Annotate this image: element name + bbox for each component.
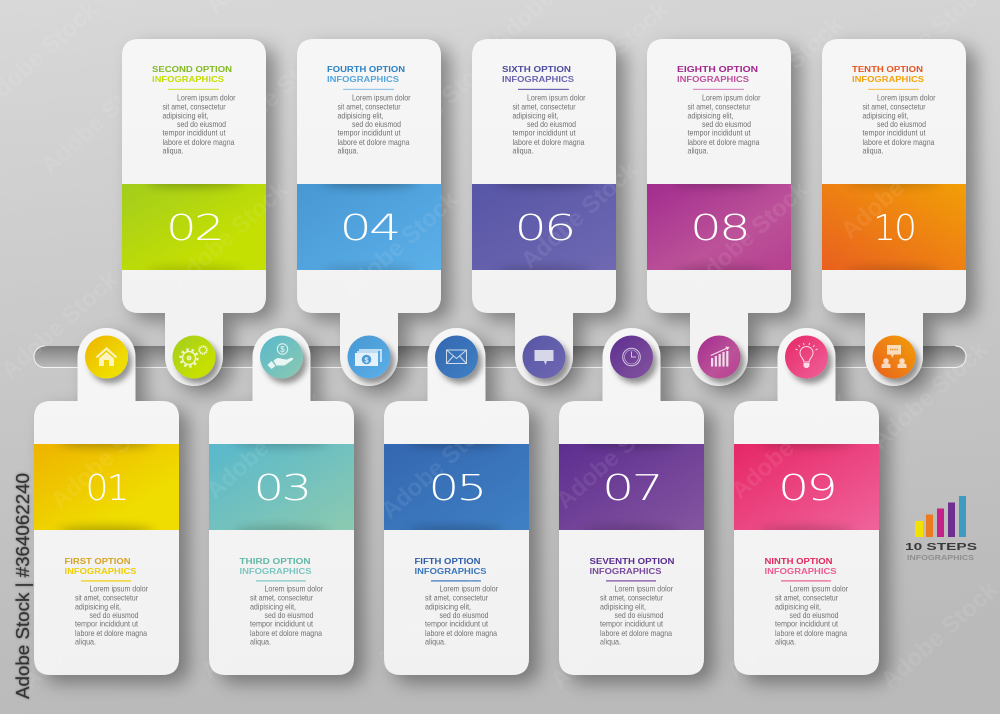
text block 08 [677,65,761,156]
icon: clock [610,336,653,378]
watermark: adobe stock pattern: Adobe Stock [371,556,499,674]
text block 02: tempor incididunt ut [162,129,226,138]
text block 06: sit amet, consectetur [512,102,576,111]
colour band 03: 03 [254,468,310,509]
text block 02: sed do eiusmod [177,120,226,129]
colour band 07: 07 [602,468,661,509]
watermark: adobe stock pattern: Adobe Stock [551,396,679,514]
colour band 10 [822,184,966,270]
card 05: fifth option [384,328,529,675]
icon: speech bubble [522,336,566,378]
text block 01: Lorem ipsum dolor [90,585,148,594]
text block 07: adipisicing elit, [600,602,646,611]
text block 08: INFOGRAPHICS [677,75,750,84]
text block 04: Lorem ipsum dolor [352,94,411,103]
text block 01: labore et dolore magna [75,629,147,638]
text block 07: sit amet, consectetur [600,593,663,602]
text block 06: adipisicing elit, [512,111,558,120]
text block 08: adipisicing elit, [688,111,734,120]
text block 05: FIFTH OPTION [414,557,481,566]
text block 08: sit amet, consectetur [688,102,751,111]
text block 07: tempor incididunt ut [600,620,664,629]
watermark: adobe stock pattern: Adobe Stock [36,61,164,179]
text block 06 [502,65,586,156]
text block 05: aliqua. [425,638,446,647]
text block 09: INFOGRAPHICS [764,567,837,576]
text block 08: EIGHTH OPTION [677,65,758,74]
colour band 10: 10 [873,208,915,249]
logo: 10 steps infographics: INFOGRAPHICS [907,555,974,562]
watermark: adobe stock pattern: Adobe Stock [726,386,854,504]
colour band 02: 02 [166,208,222,249]
card 07: seventh option [559,328,704,675]
text block 07: sed do eiusmod [614,611,664,620]
watermark: adobe stock pattern: Adobe Stock [686,176,814,294]
text block 05: adipisicing elit, [425,602,471,611]
text block 04: adipisicing elit, [338,111,384,120]
text block 10: adipisicing elit, [862,111,908,120]
text block 03: tempor incididunt ut [250,620,314,629]
text block 01: FIRST OPTION [64,557,131,566]
text block 08: tempor incididunt ut [688,129,751,138]
logo: 10 steps infographics: 10 STEPS [905,542,977,553]
colour band 02 [122,184,266,270]
logo: 10 steps infographics [905,496,977,562]
text block 03: labore et dolore magna [250,629,322,638]
text block 09: labore et dolore magna [775,629,847,638]
text block 01 [64,557,148,647]
text block 01: adipisicing elit, [75,602,121,611]
text block 08: Lorem ipsum dolor [702,94,761,103]
text block 08: labore et dolore magna [688,138,760,147]
text block 01: INFOGRAPHICS [64,567,137,576]
text block 10: TENTH OPTION [852,65,923,74]
watermark: adobe stock pattern: Adobe Stock [376,406,504,524]
text block 05 [414,557,498,647]
text block 04: aliqua. [338,147,358,156]
icon: hand with coin [260,336,303,378]
text block 09: sit amet, consectetur [775,593,838,602]
mini bar chart [915,496,966,537]
text block 05: INFOGRAPHICS [414,567,487,576]
card 06: sixth option [472,39,616,386]
colour band 03 [209,444,354,530]
text block 01: aliqua. [75,638,96,647]
text block 02 [152,65,236,156]
colour band 01 [34,444,179,530]
text block 04: labore et dolore magna [338,138,410,147]
icon: banknotes: $ [364,355,369,364]
text block 07: labore et dolore magna [600,629,672,638]
text block 02: SECOND OPTION [152,65,232,74]
text block 04: sed do eiusmod [352,120,401,129]
text block 07: SEVENTH OPTION [590,557,675,566]
text block 06: SIXTH OPTION [502,65,571,74]
text block 04: sit amet, consectetur [338,102,401,111]
text block 04: INFOGRAPHICS [327,75,400,84]
text block 05: labore et dolore magna [425,629,497,638]
text block 09 [764,557,848,647]
text block 04 [327,65,411,156]
text block 07 [590,557,675,647]
text block 07: Lorem ipsum dolor [614,585,673,594]
colour band 05: 05 [428,468,484,509]
watermark: adobe stock pattern: Adobe Stock [201,386,329,504]
text block 06: tempor incididunt ut [512,129,576,138]
text block 07: aliqua. [600,638,621,647]
colour band 04 [297,184,441,270]
watermark: adobe stock pattern: Adobe Stock [836,126,964,244]
text block 02: Lorem ipsum dolor [177,94,236,103]
colour band 06 [472,184,616,270]
card 01: first option [34,328,179,675]
watermark: adobe stock pattern: Adobe Stock [336,186,464,304]
text block 03 [240,557,323,647]
text block 03: Lorem ipsum dolor [264,585,323,594]
watermark: adobe stock pattern: Adobe Stock [46,396,174,514]
watermark: adobe stock pattern: Adobe Stock [546,576,674,694]
icon: gears [172,336,216,378]
text block 10: labore et dolore magna [862,138,935,147]
colour band 08 [647,184,791,270]
text block 03: sit amet, consectetur [250,593,313,602]
watermark: adobe stock pattern: Adobe Stock [166,176,294,294]
text block 05: tempor incididunt ut [425,620,489,629]
card 10: tenth option [822,39,966,386]
text block 02: INFOGRAPHICS [152,75,225,84]
text block 05: sed do eiusmod [440,611,489,620]
colour band 09: 09 [778,468,835,509]
text block 06: INFOGRAPHICS [502,75,575,84]
text block 06: aliqua. [512,147,534,156]
watermark: adobe stock pattern: Adobe Stock [721,11,849,129]
watermark: adobe stock pattern: Adobe Stock [211,36,339,154]
text block 10: tempor incididunt ut [862,129,926,138]
text block 09: aliqua. [775,638,796,647]
card 02: second option [122,39,266,386]
text block 10: sed do eiusmod [877,120,926,129]
stock id label: Adobe Stock | #364062240 [12,473,33,699]
text block 08: sed do eiusmod [702,120,751,129]
icon: banknotes [348,336,390,378]
text block 05: Lorem ipsum dolor [440,585,498,594]
card 04: fourth option [297,39,441,386]
colour band 04: 04 [340,208,399,249]
text block 05: sit amet, consectetur [425,593,488,602]
icon: envelope [435,336,478,378]
icon: rising bar chart [698,336,740,378]
colour band 09 [734,444,879,530]
text block 04: FOURTH OPTION [327,65,405,74]
text block 03: aliqua. [250,638,271,647]
text block 02: adipisicing elit, [162,111,208,120]
text block 06: sed do eiusmod [527,120,576,129]
watermark: adobe stock pattern: Adobe Stock [16,576,144,694]
text block 08: aliqua. [688,147,708,156]
text block 02: sit amet, consectetur [162,102,226,111]
text block 07: INFOGRAPHICS [590,567,662,576]
watermark: adobe stock pattern: Adobe Stock [876,576,1000,694]
text block 09: sed do eiusmod [790,611,839,620]
text block 03: sed do eiusmod [264,611,314,620]
text block 09: NINTH OPTION [764,557,833,566]
watermark: adobe stock pattern: Adobe Stock [376,46,504,164]
text block 02: labore et dolore magna [162,138,235,147]
timeline rail [34,346,966,368]
text block 03: THIRD OPTION [240,557,311,566]
icon: people talking [872,336,916,378]
watermark: adobe stock pattern: Adobe Stock [721,566,849,684]
text block 04: tempor incididunt ut [338,129,401,138]
text block 09: tempor incididunt ut [775,620,839,629]
text block 10 [852,65,936,156]
text block 03: INFOGRAPHICS [240,567,312,576]
text block 02: aliqua. [162,147,184,156]
icon: home [85,336,128,378]
text block 01: tempor incididunt ut [75,620,139,629]
colour band 01: 01 [86,468,128,509]
icon: light bulb [785,336,828,378]
text block 06: labore et dolore magna [512,138,585,147]
watermark: adobe stock pattern: Adobe Stock [516,156,644,274]
text block 01: sit amet, consectetur [75,593,138,602]
watermark: adobe stock pattern: Adobe Stock [866,336,994,454]
text block 10: Lorem ipsum dolor [877,94,936,103]
colour band 08: 08 [690,208,748,249]
card 09: ninth option [734,328,879,675]
colour band 07 [559,444,704,530]
text block 09: adipisicing elit, [775,602,821,611]
text block 10: INFOGRAPHICS [852,75,925,84]
card 08: eighth option [647,39,791,386]
text block 01: sed do eiusmod [90,611,139,620]
text block 09: Lorem ipsum dolor [790,585,848,594]
text block 06: Lorem ipsum dolor [527,94,586,103]
text block 03: adipisicing elit, [250,602,296,611]
card 03: third option [209,328,354,675]
colour band 05 [384,444,529,530]
watermark: adobe stock pattern: Adobe Stock [196,566,324,684]
colour band 06: 06 [514,208,574,249]
text block 10: aliqua. [862,147,884,156]
text block 10: sit amet, consectetur [862,102,926,111]
icon: hand with coin: $ [280,345,285,354]
